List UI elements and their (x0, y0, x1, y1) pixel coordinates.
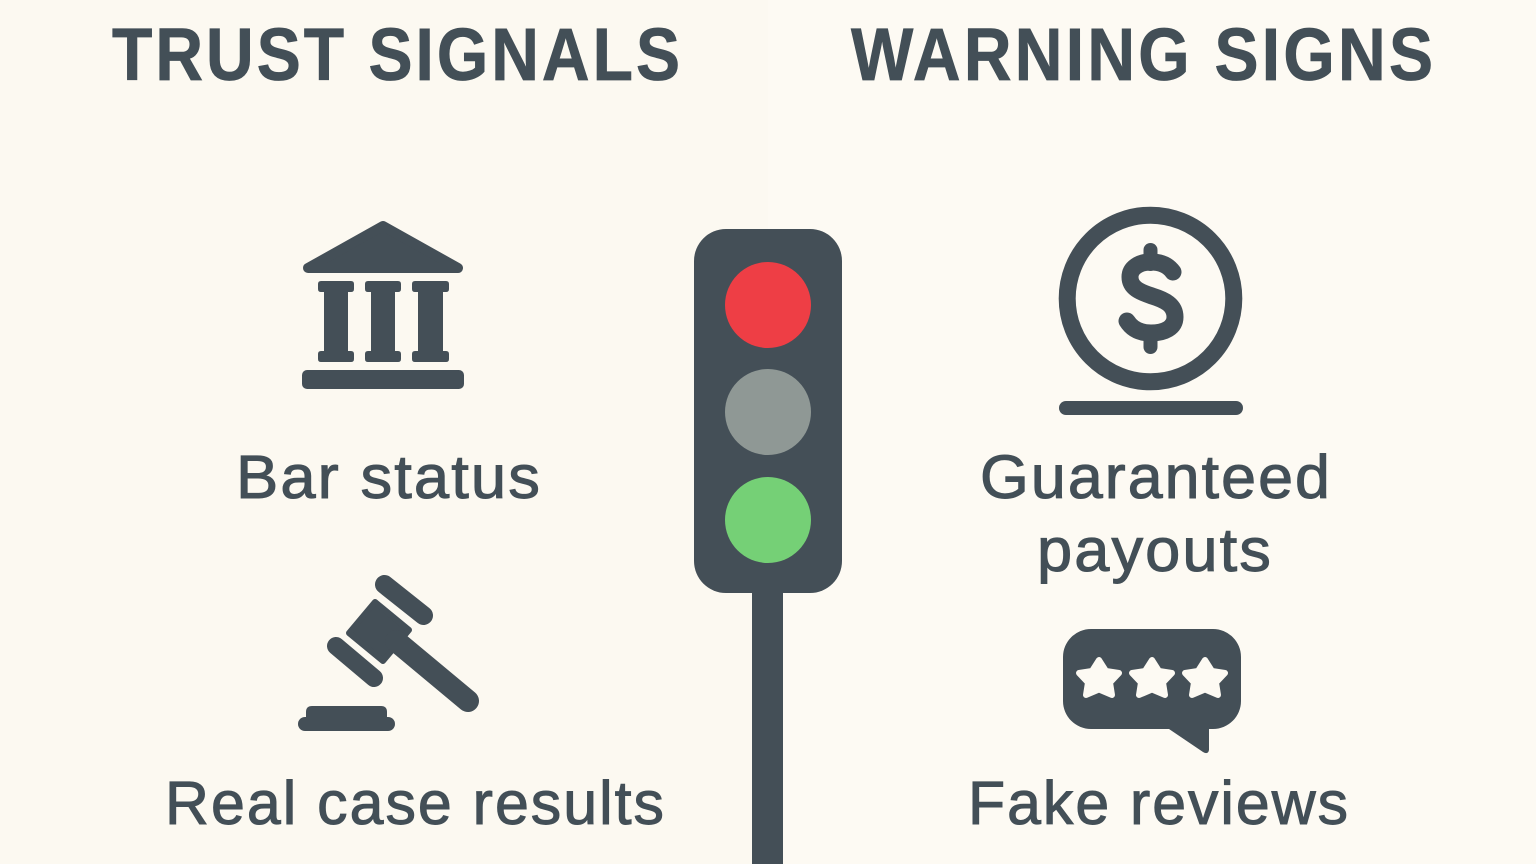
red light (725, 262, 811, 348)
label: guaranteed payouts (980, 443, 1332, 584)
label: real case results: Real case results (165, 769, 666, 837)
label: guaranteed payouts: Guaranteed (980, 443, 1332, 511)
icon: gavel (298, 584, 468, 731)
grey light (725, 369, 811, 455)
icon: review bubble with stars (1063, 629, 1241, 753)
label: guaranteed payouts: payouts (1037, 516, 1273, 584)
icon: dollar coin (1059, 215, 1243, 415)
label: fake reviews: Fake reviews (968, 769, 1350, 837)
traffic light (694, 229, 842, 864)
heading: trust signals: TRUST SIGNALS (112, 14, 680, 96)
label: bar status: Bar status (236, 443, 542, 511)
icon: bank building (302, 226, 464, 389)
housing (694, 229, 842, 593)
green light (725, 477, 811, 563)
pole (752, 585, 783, 864)
heading: warning signs: WARNING SIGNS (851, 14, 1433, 96)
